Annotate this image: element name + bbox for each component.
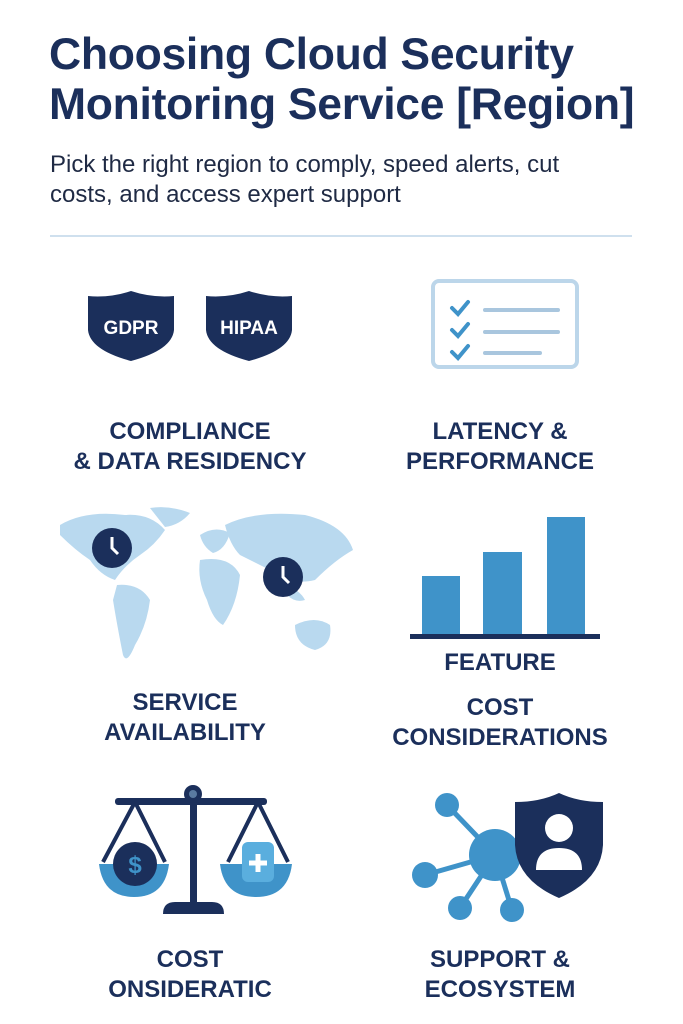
label: compliance: COMPLIANCE [109,418,271,445]
label: compliance [74,418,306,475]
icon: scale: $ [128,852,142,879]
label: cost considerations 2: ONSIDERATIC [108,976,272,1003]
icon: scale [99,785,292,914]
label: cost considerations: COST [467,694,533,721]
title: Monitoring Service [Region] [49,80,634,129]
label: feature: FEATURE [444,649,556,676]
label: service availability: AVAILABILITY [104,719,266,746]
label: support [425,946,575,1003]
label: service availability [104,689,266,746]
label: support: ECOSYSTEM [425,976,575,1003]
icon: compliance shields [88,291,292,361]
title [49,30,634,129]
subtitle: Pick the right region to comply, speed alerts, cut [50,151,559,178]
label: latency [406,418,594,475]
subtitle: costs, and access expert support [50,181,401,208]
title: Choosing Cloud Security [49,30,574,79]
label: cost considerations 2 [108,946,272,1003]
subtitle [50,151,559,208]
label: support: SUPPORT & [430,946,570,973]
icon: compliance shields: GDPR [104,318,159,339]
label: service availability: SERVICE [133,689,237,716]
icon: world map with clocks [60,507,353,658]
label: cost considerations 2: COST [157,946,223,973]
label: cost considerations: CONSIDERATIONS [392,724,608,751]
label: latency: LATENCY & [432,418,568,445]
label: cost considerations [392,694,608,751]
label: latency: PERFORMANCE [406,448,594,475]
icon: network and shield [412,793,603,922]
icon: bar chart [410,517,600,639]
icon: checklist [431,279,579,369]
icon: compliance shields: HIPAA [220,318,278,339]
label: compliance: & DATA RESIDENCY [74,448,306,475]
